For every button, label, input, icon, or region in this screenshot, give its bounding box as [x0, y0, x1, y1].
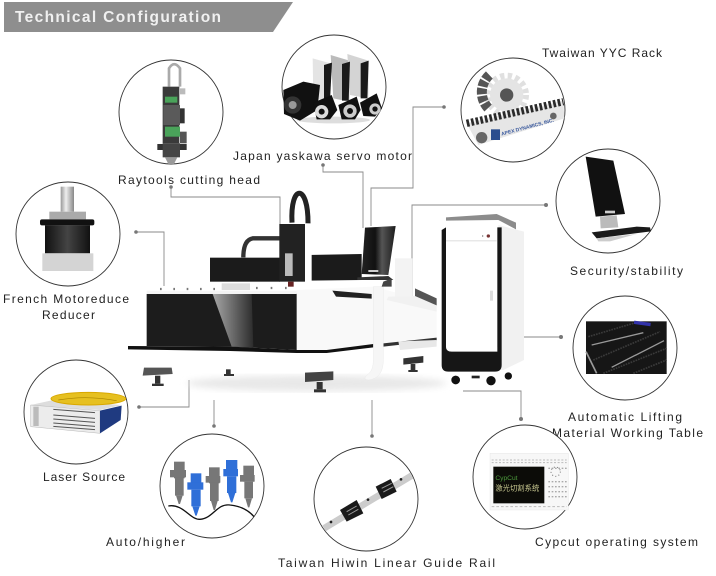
icon: gear and rack [467, 75, 564, 145]
laser cutting machine [128, 193, 524, 392]
label: Security/stability [570, 264, 683, 278]
label: Cypcut operating system [535, 535, 698, 549]
panel: Japan yaskawa servo motor [233, 35, 412, 163]
label [3, 292, 129, 322]
icon: gear and rack: APEX DYNAMICS, INC. [501, 118, 555, 138]
panel: Cypcut operating system [473, 425, 698, 549]
panel: Automatic Lifting Material Working Table [552, 296, 703, 440]
label [552, 410, 703, 440]
control cabinet [442, 214, 524, 385]
label: Material Working Table [552, 426, 703, 440]
title banner: Technical Configuration [15, 9, 221, 26]
icon: laser source [31, 392, 126, 433]
icon: monitor [586, 157, 651, 241]
label: Reducer [42, 308, 95, 322]
icon: servo motors [283, 54, 382, 123]
machine bed [128, 258, 437, 370]
label: Auto/higher [106, 535, 185, 549]
machine monitor [357, 226, 396, 287]
icon: software screen: CypCut [495, 475, 518, 482]
icon: cutting head [157, 64, 187, 164]
panel: French Motoreduce Reducer [3, 182, 129, 322]
label: French Motoreduce [3, 292, 129, 306]
label: Laser Source [43, 470, 125, 484]
icon: software screen [490, 453, 568, 510]
label: Japan yaskawa servo motor [233, 149, 412, 163]
panel: Twaiwan YYC Rack [461, 46, 663, 162]
label: Twaiwan YYC Rack [542, 46, 663, 60]
icon: linear guide rail [324, 476, 412, 528]
icon: working table [586, 321, 667, 374]
icon: nozzles over curve [168, 460, 255, 519]
label: Taiwan Hiwin Linear Guide Rail [278, 556, 495, 570]
icon: software screen: 激光切割系统 [495, 484, 540, 493]
title banner [4, 2, 293, 32]
icon: reducer [40, 187, 94, 271]
panel: Raytools cutting head [118, 60, 260, 187]
panel: Laser Source [24, 360, 128, 484]
panel: Auto/higher [106, 434, 264, 549]
gantry beam [210, 225, 362, 282]
label: Raytools cutting head [118, 173, 260, 187]
front column [365, 287, 383, 380]
machine feet [143, 356, 423, 392]
cutting head [279, 193, 308, 287]
panel: Security/stability [556, 149, 683, 278]
panel: Taiwan Hiwin Linear Guide Rail [278, 447, 495, 570]
label: Automatic Lifting [568, 410, 682, 424]
leader lines [134, 105, 563, 438]
